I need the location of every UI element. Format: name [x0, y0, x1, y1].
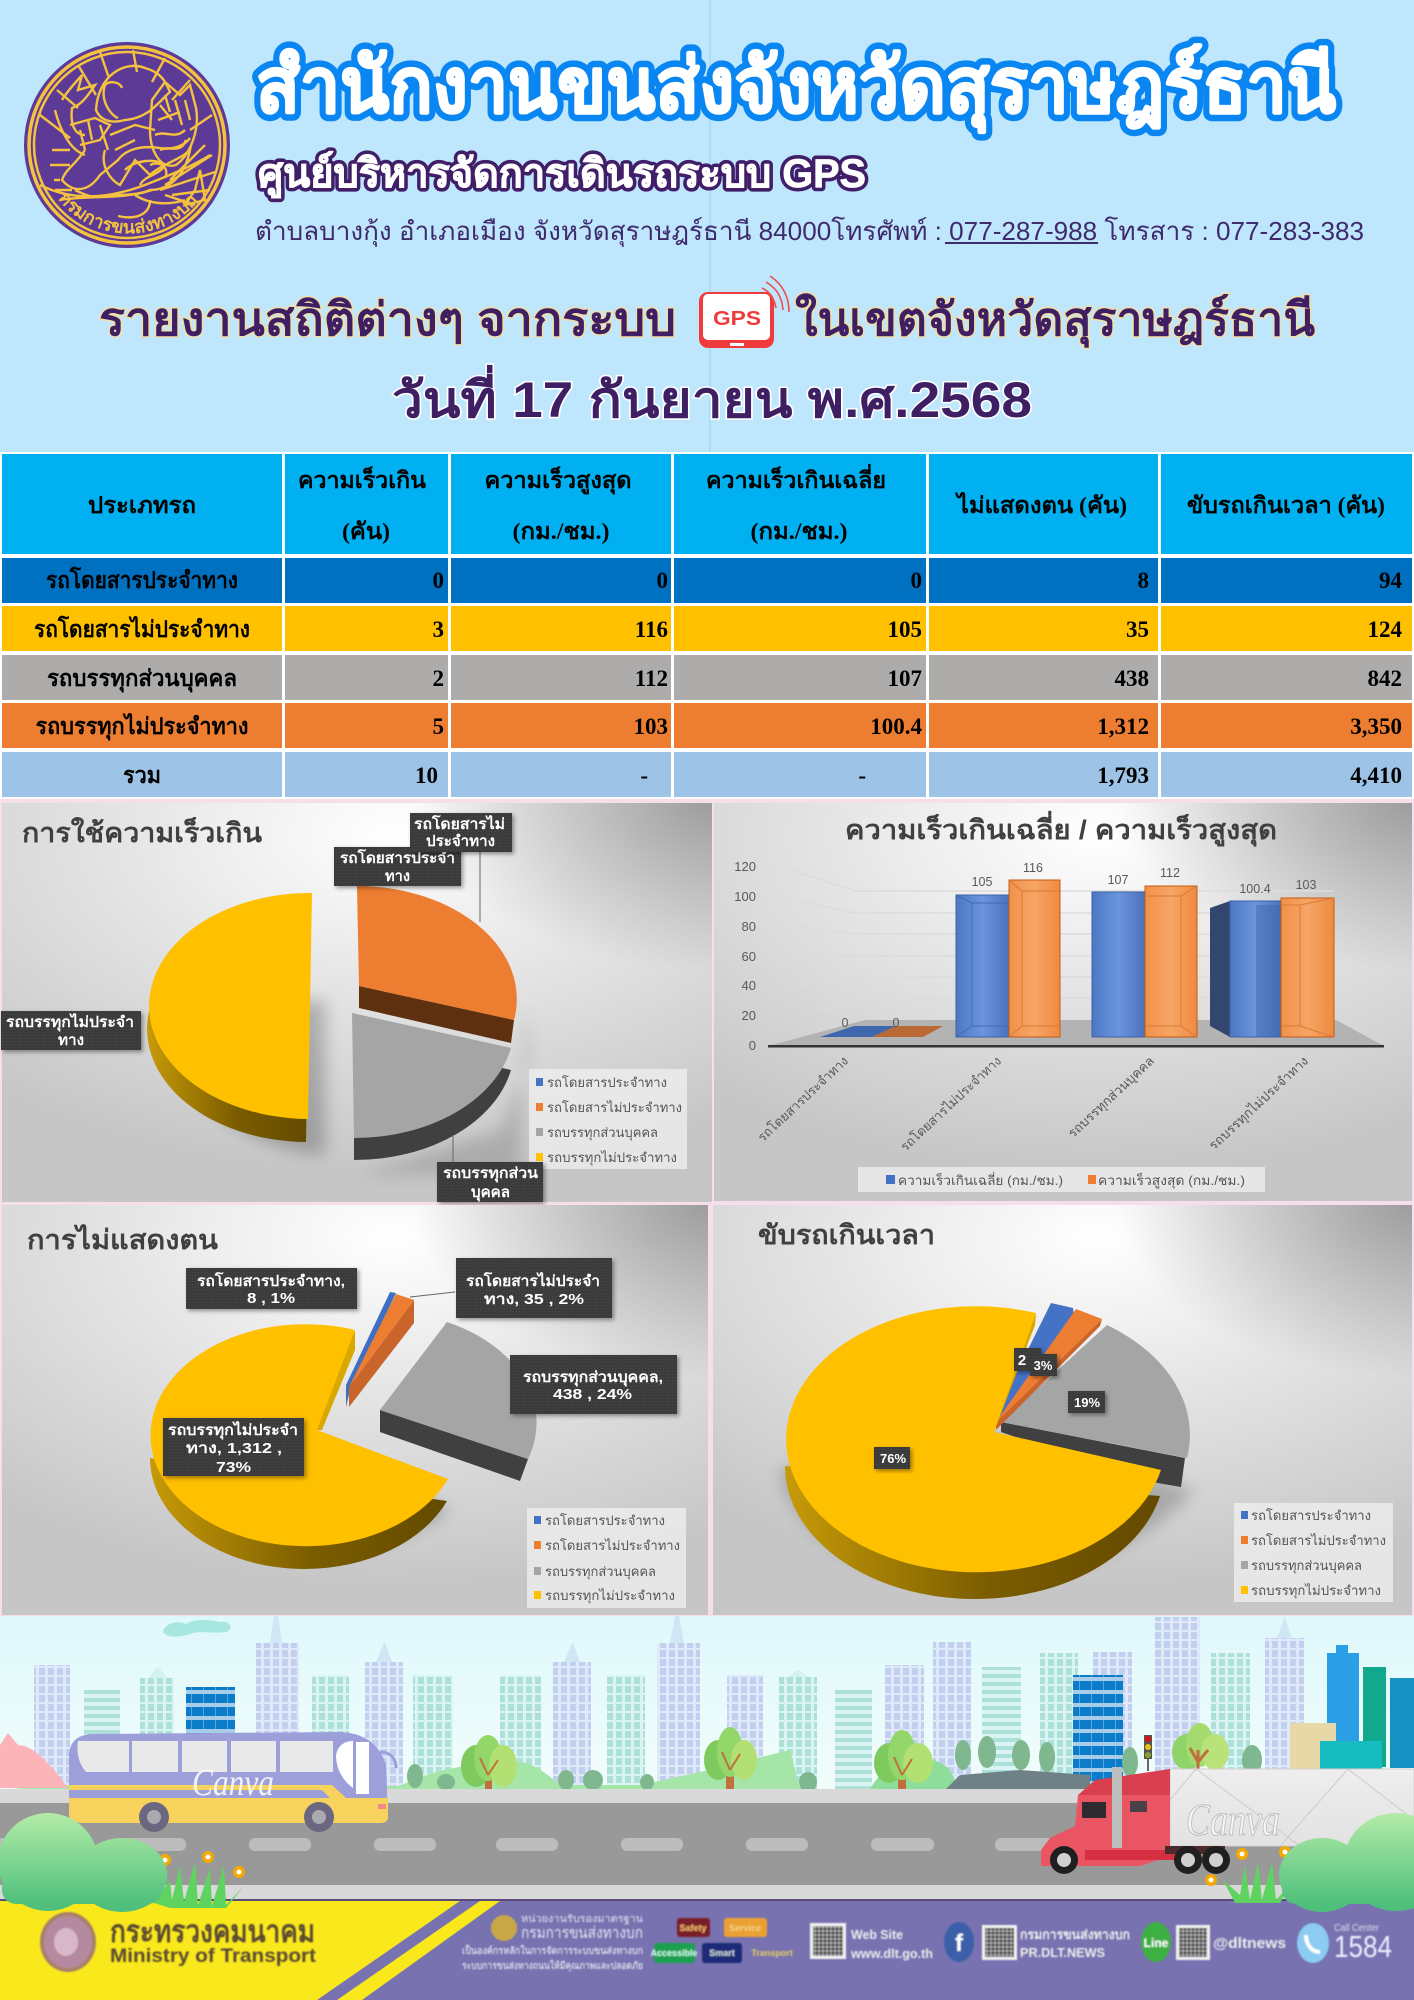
- callout: non-route truck: ทาง: [58, 1032, 84, 1049]
- y axis labels: [734, 859, 756, 1053]
- table header row: ความเร็วเกิน: [298, 465, 426, 493]
- table header row: ประเภทรถ: [88, 493, 196, 518]
- data labels: 112: [1160, 866, 1180, 880]
- icon: line: Line: [1144, 1936, 1169, 1950]
- row: รถโดยสารไม่ประจำทาง: รถโดยสารไม่ประจำทาง: [34, 615, 250, 642]
- title: office name: สำนักงานขนส่งจังหวัดสุราษฎร์ธานี: [256, 44, 1336, 134]
- callout: route bus value: รถโดยสารประจำทาง,: [197, 1271, 345, 1290]
- row: รถโดยสารไม่ประจำทาง: [2, 606, 1412, 651]
- row: รถโดยสารไม่ประจำทาง: 116: [635, 617, 668, 642]
- row: รวม: -: [640, 763, 648, 788]
- row: รถโดยสารประจำทาง: 0: [656, 568, 668, 593]
- row: รถโดยสารไม่ประจำทาง: 124: [1368, 617, 1402, 642]
- data labels: 100.4: [1239, 882, 1271, 896]
- watermark on bus: Canva: [192, 1762, 274, 1804]
- callout: private truck: รถบรรทุกส่วน: [443, 1165, 539, 1183]
- row: รถบรรทุกส่วนบุคคล: [2, 655, 1412, 700]
- bus: [69, 1732, 396, 1832]
- row: รถโดยสารประจำทาง: [2, 558, 1412, 603]
- pink shrub: [0, 1733, 68, 1788]
- pie slice: blue: [993, 1303, 1074, 1425]
- chart floor: [768, 1020, 1384, 1048]
- legend: speed bars: ความเร็วเกินเฉลี่ย (กม./ชม.): [898, 1171, 1063, 1188]
- row: รถบรรทุกส่วนบุคคล: รถบรรทุกส่วนบุคคล: [47, 666, 237, 693]
- contact row: Web Site: [851, 1927, 903, 1942]
- y axis labels: 60: [742, 949, 756, 964]
- contact row: [810, 1922, 1392, 1964]
- category axis labels: รถโดยสารประจำทาง: [755, 1053, 851, 1145]
- callout: non-route bus value: ทาง, 35 , 2%: [484, 1291, 584, 1308]
- legend: speed bars: [858, 1167, 1265, 1192]
- buildings: periwinkle towers: [34, 1616, 1304, 1790]
- row: รถบรรทุกไม่ประจำทาง: 100.4: [870, 714, 922, 739]
- pie slice: gray: [352, 1013, 511, 1160]
- legend: overtime pie: รถโดยสารประจำทาง: [1251, 1508, 1371, 1523]
- legend: speeding pie: รถโดยสารไม่ประจำทาง: [547, 1100, 682, 1115]
- statistics table: [0, 452, 1414, 801]
- legend: overtime pie: รถโดยสารไม่ประจำทาง: [1251, 1533, 1386, 1548]
- panel: no-identification pie chart: [2, 1205, 708, 1615]
- row: รถบรรทุกไม่ประจำทาง: 3,350: [1350, 714, 1402, 739]
- traffic light: [1144, 1735, 1152, 1771]
- category axis labels: รถบรรทุกไม่ประจำทาง: [1206, 1053, 1312, 1154]
- department block: [462, 1914, 643, 1972]
- legend: overtime pie: รถบรรทุกส่วนบุคคล: [1251, 1558, 1362, 1574]
- table header row: ความเร็วสูงสุด: [484, 465, 632, 495]
- ministry name: Ministry of Transport: [110, 1946, 317, 1967]
- chart title: speed: ความเร็วเกินเฉลี่ย / ความเร็วสูงสุด: [845, 810, 1277, 847]
- bars: private truck: [1092, 886, 1197, 1037]
- callout: private truck: บุคคล: [471, 1184, 510, 1202]
- row: รถบรรทุกไม่ประจำทาง: 5: [432, 714, 444, 739]
- heading: report title right part: ในเขตจังหวัดสุราษฎร์ธานี: [795, 292, 1316, 348]
- chart title: speeding: การใช้ความเร็วเกิน: [22, 815, 263, 848]
- subtitle: GPS center: ศูนย์บริหารจัดการเดินรถระบบ GPS: [258, 151, 866, 198]
- callout: route bus: ทาง: [385, 868, 410, 885]
- data labels: 107: [1108, 873, 1128, 887]
- department block: กรมการขนส่งทางบก: [521, 1925, 643, 1942]
- icon: facebook: f: [955, 1930, 964, 1957]
- value label: 2%: [1014, 1348, 1041, 1371]
- call center number: Call Center: [1334, 1923, 1380, 1934]
- grass and flowers: right: [1205, 1846, 1291, 1903]
- legend: no identification pie: รถโดยสารไม่ประจำทาง: [545, 1538, 680, 1553]
- panel: overtime driving pie chart: [713, 1205, 1412, 1615]
- row: รถบรรทุกส่วนบุคคล: 112: [635, 666, 668, 691]
- value badges: Accessible: [650, 1948, 698, 1958]
- row: รถบรรทุกไม่ประจำทาง: 103: [634, 714, 668, 739]
- row: รวม: 1,793: [1097, 763, 1149, 788]
- bars: non-route truck: [1210, 898, 1334, 1037]
- category axis labels: รถบรรทุกส่วนบุคคล: [1065, 1053, 1158, 1141]
- callout: private truck value: 438 , 24%: [553, 1386, 632, 1403]
- callout: non-route bus: ประจำทาง: [426, 833, 495, 850]
- value badges: Safety: [679, 1923, 707, 1933]
- tree: mid street tree: [704, 1727, 757, 1796]
- city skyline scene: [0, 1616, 1414, 1803]
- y axis labels: 40: [742, 978, 756, 993]
- row: รถโดยสารประจำทาง: 0: [432, 568, 444, 593]
- data labels: 0: [842, 1016, 849, 1030]
- value label: 76%: 76%: [880, 1451, 906, 1466]
- y axis labels: 20: [742, 1008, 756, 1023]
- grass and flowers: left: [154, 1851, 245, 1908]
- table header row: [2, 454, 1412, 554]
- value badges: Service: [729, 1923, 761, 1933]
- callout: non-route bus: [410, 813, 512, 852]
- callout: private truck value: [510, 1355, 677, 1414]
- legend: speed bars: ความเร็วสูงสุด (กม./ชม.): [1098, 1171, 1245, 1189]
- callout: non-route bus value: รถโดยสารไม่ประจำ: [466, 1271, 600, 1290]
- icon: line: [1141, 1922, 1171, 1962]
- value label: 3%: 3%: [1034, 1358, 1053, 1373]
- value badges: [650, 1918, 793, 1963]
- panel: average and maximum speed bar chart: [714, 803, 1412, 1201]
- data labels: 103: [1296, 878, 1316, 892]
- pie slice: yellow: [785, 1306, 1161, 1599]
- row: รถโดยสารประจำทาง: 0: [910, 568, 922, 593]
- row: รถบรรทุกไม่ประจำทาง: [2, 703, 1412, 748]
- tree: right tree behind truck: [1172, 1723, 1229, 1775]
- truck: [1041, 1767, 1414, 1874]
- legend: speeding pie: [529, 1069, 687, 1169]
- callout: route bus: [334, 847, 461, 886]
- subtitle: GPS center: ศูนย์บริหารจัดการเดินรถระบบ GPS: [258, 151, 866, 198]
- buildings: blue office towers: [186, 1645, 1414, 1788]
- y axis labels: 120: [734, 859, 756, 874]
- department block: หน่วยงานรับรองมาตรฐาน: [521, 1914, 643, 1925]
- callout: non-route bus: รถโดยสารไม่: [414, 814, 505, 833]
- row: รถบรรทุกส่วนบุคคล: 842: [1368, 666, 1402, 691]
- buildings: teal towers: [84, 1653, 1250, 1790]
- value badges: Smart: [709, 1948, 735, 1958]
- department block: เป็นองค์กรหลักในการจัดการระบบขนส่งทางบก: [462, 1943, 643, 1957]
- value label: 2%: 2: [1018, 1352, 1026, 1369]
- legend: no identification pie: รถบรรทุกส่วนบุคคล: [545, 1564, 656, 1580]
- tree: left street tree: [461, 1735, 517, 1803]
- contact row: PR.DLT.NEWS: [1020, 1945, 1105, 1960]
- date heading: วันที่ 17 กันยายน พ.ศ.2568: [392, 365, 1032, 428]
- watermark on trailer: Canva: [1186, 1794, 1280, 1845]
- legend: no identification pie: [527, 1508, 686, 1608]
- bush: left: [0, 1813, 167, 1912]
- legend: speeding pie: รถโดยสารประจำทาง: [547, 1075, 667, 1090]
- table header row: (กม./ชม.): [750, 519, 848, 544]
- legend: no identification pie: รถบรรทุกไม่ประจำทาง: [545, 1588, 675, 1604]
- bars: route bus zero values: [820, 1026, 943, 1037]
- department block: ระบบการขนส่งทางถนนให้มีคุณภาพและปลอดภัย: [462, 1960, 643, 1972]
- table header row: ขับรถเกินเวลา (คัน): [1187, 493, 1385, 518]
- legend: no identification pie: รถโดยสารประจำทาง: [545, 1513, 665, 1528]
- bush: right: [1279, 1813, 1414, 1912]
- row: รถบรรทุกไม่ประจำทาง: รถบรรทุกไม่ประจำทาง: [36, 712, 248, 741]
- value label: 3%: [1030, 1354, 1057, 1376]
- ministry name: [110, 1914, 317, 1967]
- callout: non-route truck: รถบรรทุกไม่ประจำ: [6, 1012, 134, 1032]
- contact row: @dltnews: [1213, 1935, 1286, 1952]
- road: [0, 1789, 1414, 1900]
- QR code: facebook page: [982, 1925, 1017, 1960]
- callout: non-route truck value: 73%: [216, 1459, 251, 1476]
- callout: non-route truck: [1, 1011, 141, 1050]
- callout: non-route bus value: [456, 1258, 612, 1318]
- callout: private truck: [437, 1162, 543, 1202]
- logo: Department of Land Transport seal: [24, 42, 230, 248]
- pie slice: blue sliver: [346, 1292, 396, 1407]
- callout: non-route truck value: ทาง, 1,312 ,: [186, 1440, 282, 1457]
- category axis labels: รถโดยสารไม่ประจำทาง: [897, 1053, 1004, 1154]
- row: รวม: -: [858, 763, 866, 788]
- value label: 76%: [874, 1447, 910, 1469]
- category axis labels: [755, 1053, 1312, 1154]
- address and phone line: ตำบลบางกุ้ง อำเภอเมือง จังหวัดสุราษฎร์ธานี 84000โทรศัพท์ : 077-287-988 โทรสาร : 077-283-383: [255, 216, 1364, 247]
- callout: non-route truck value: รถบรรทุกไม่ประจำ: [168, 1420, 298, 1440]
- horizon greenery: [0, 1736, 1262, 1792]
- value label: 19%: 19%: [1074, 1395, 1100, 1410]
- chart title: no identification: การไม่แสดงตน: [27, 1224, 219, 1255]
- pie slice: gray: [380, 1322, 537, 1481]
- icon: facebook: [944, 1922, 974, 1962]
- header background: [0, 0, 1414, 454]
- data labels: 105: [972, 875, 992, 889]
- table header row: (คัน): [342, 519, 390, 544]
- data labels: 116: [1023, 861, 1043, 875]
- table header row: (กม./ชม.): [512, 519, 610, 544]
- data labels: [842, 861, 1316, 1030]
- row: รถโดยสารประจำทาง: 8: [1138, 568, 1149, 593]
- QR code: website: [810, 1923, 846, 1959]
- callout: route bus: รถโดยสารประจำ: [340, 848, 455, 867]
- row: รถโดยสารประจำทาง: รถโดยสารประจำทาง: [46, 566, 238, 593]
- pie slice: yellow: [147, 893, 312, 1142]
- chart title: overtime: ขับรถเกินเวลา: [758, 1220, 935, 1250]
- table header row: ไม่แสดงตน (คัน): [954, 491, 1127, 518]
- pie slice: orange: [357, 886, 517, 1043]
- row: รถโดยสารไม่ประจำทาง: 3: [432, 617, 444, 642]
- title: office name: สำนักงานขนส่งจังหวัดสุราษฎร์ธานี: [256, 44, 1336, 134]
- pie slice: orange sliver: [349, 1294, 414, 1407]
- row: รถโดยสารประจำทาง: 94: [1379, 568, 1402, 593]
- chart backdrop strip: [0, 799, 1414, 1619]
- ministry name: กระทรวงคมนาคม: [110, 1914, 315, 1949]
- contact row: www.dlt.go.th: [850, 1946, 933, 1961]
- cloud: [163, 1620, 230, 1637]
- row: รถโดยสารไม่ประจำทาง: 35: [1126, 617, 1149, 642]
- y axis labels: 80: [742, 919, 756, 934]
- callout: route bus value: [186, 1268, 357, 1309]
- pie slice: orange: [996, 1309, 1102, 1430]
- pie slice: gray: [1001, 1325, 1190, 1487]
- value label: 19%: [1068, 1391, 1105, 1413]
- callout: private truck value: รถบรรทุกส่วนบุคคล,: [523, 1369, 663, 1387]
- y axis labels: 0: [749, 1038, 756, 1053]
- y axis labels: 100: [734, 889, 756, 904]
- legend: speeding pie: รถบรรทุกไม่ประจำทาง: [547, 1150, 677, 1166]
- row: รวม: 4,410: [1350, 763, 1402, 788]
- row: รถโดยสารไม่ประจำทาง: 105: [888, 617, 922, 642]
- contact row: กรมการขนส่งทางบก: [1020, 1927, 1130, 1942]
- table header row: ความเร็วเกินเฉลี่ย: [706, 463, 886, 493]
- footer band: [0, 1899, 1414, 2000]
- heading: report title left part: รายงานสถิติต่างๆ จากระบบ: [99, 293, 676, 345]
- row: รถบรรทุกส่วนบุคคล: 2: [432, 666, 444, 691]
- row: รวม: [2, 752, 1412, 797]
- row: รวม: รวม: [123, 763, 161, 788]
- ministry seal: [40, 1912, 96, 1972]
- legend: overtime pie: รถบรรทุกไม่ประจำทาง: [1251, 1583, 1381, 1599]
- icon: GPS tablet: GPS: [713, 308, 761, 330]
- tree: center street tree: [874, 1730, 933, 1800]
- panel: speeding pie chart: [1, 803, 712, 1202]
- row: รถบรรทุกส่วนบุคคล: 107: [888, 666, 922, 691]
- callout: route bus value: 8 , 1%: [247, 1290, 295, 1307]
- legend: overtime pie: [1234, 1503, 1393, 1602]
- QR code: line account: [1176, 1925, 1210, 1960]
- call center number: 1584: [1334, 1929, 1392, 1964]
- callout: non-route truck value: [163, 1418, 304, 1476]
- legend: speeding pie: รถบรรทุกส่วนบุคคล: [547, 1125, 658, 1141]
- bars: non-route bus: [956, 880, 1060, 1037]
- logo: Department of Land Transport seal: กรมการขนส่งทางบก: [58, 194, 197, 234]
- icon: GPS tablet: [699, 276, 789, 348]
- icon: phone: [1297, 1923, 1329, 1963]
- pie slice: yellow: [150, 1324, 448, 1569]
- value badges: Transport: [751, 1948, 793, 1958]
- data labels: 0: [893, 1016, 900, 1030]
- row: รถบรรทุกส่วนบุคคล: 438: [1114, 666, 1149, 691]
- row: รถบรรทุกไม่ประจำทาง: 1,312: [1097, 714, 1149, 739]
- row: รวม: 10: [415, 763, 438, 788]
